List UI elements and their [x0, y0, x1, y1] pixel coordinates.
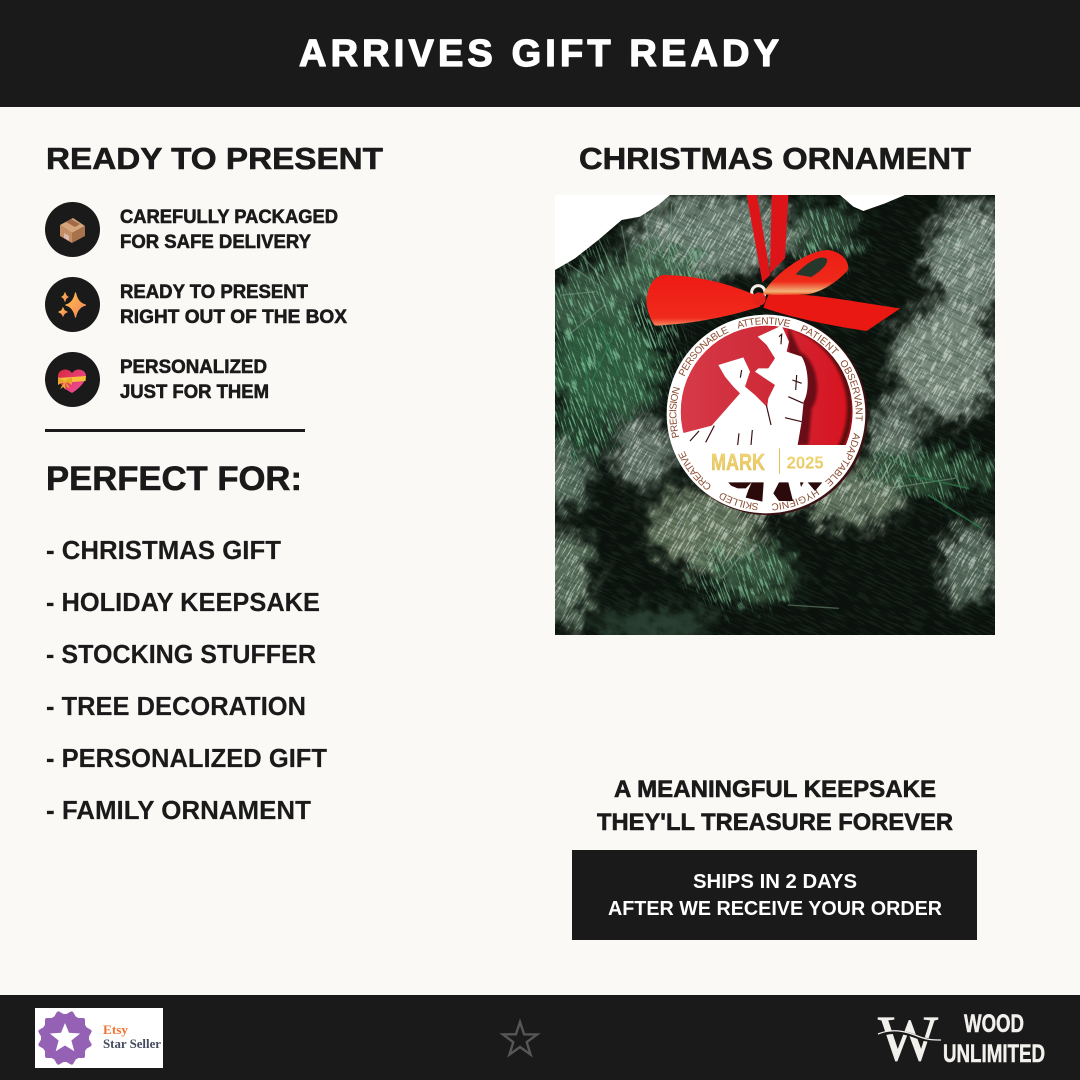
benefit: ready out of the box: RIGHT OUT OF THE BOX — [120, 306, 347, 328]
ornament ring words: CREATIVE — [678, 451, 710, 490]
benefit: ready out of the box — [45, 277, 347, 332]
list of occasions — [46, 537, 327, 825]
tagline: THEY'LL TREASURE FOREVER — [597, 809, 953, 836]
badge: etsy star seller: Star Seller — [103, 1037, 161, 1051]
pine foliage — [555, 195, 995, 635]
engraved name and year: 2025 — [787, 452, 824, 472]
panel: perfect for — [46, 460, 327, 825]
ornament ring words: ATTENTIVE — [738, 317, 790, 329]
footer band — [0, 995, 1080, 1080]
icon: sparkles — [59, 293, 86, 317]
list of occasions: - STOCKING STUFFER — [46, 641, 316, 669]
hanging ribbon — [747, 195, 788, 282]
red backing layer — [680, 326, 853, 445]
photo: ornament on pine branch — [555, 195, 995, 635]
logo: wood unlimited — [878, 1003, 1045, 1075]
benefit: personalized: PERSONALIZED — [120, 356, 267, 378]
ornament ring words: HYGIENIC — [772, 490, 820, 510]
shipping callout — [572, 850, 977, 940]
list of occasions: - CHRISTMAS GIFT — [46, 537, 281, 565]
benefit: personalized: JUST FOR THEM — [120, 381, 269, 403]
engraved name and year: MARK — [711, 449, 765, 475]
benefit: ready out of the box: READY TO PRESENT — [120, 281, 308, 303]
ornament — [646, 195, 900, 515]
heading: christmas ornament: CHRISTMAS ORNAMENT — [579, 141, 971, 176]
ornament ring words: PERSONABLE — [678, 326, 729, 376]
heading: perfect for: PERFECT FOR: — [46, 460, 302, 498]
logo: wood unlimited: UNLIMITED — [943, 1040, 1045, 1068]
icon: package box — [60, 218, 85, 243]
badge: etsy star seller: Etsy — [103, 1022, 129, 1037]
logo mark: W: W — [878, 1003, 939, 1075]
lower cutouts — [728, 482, 822, 502]
title: ARRIVES GIFT READY — [299, 33, 779, 75]
ornament ring words — [669, 317, 863, 510]
ornament ring words: OBSERVANT — [840, 360, 863, 422]
benefit: packaged: CAREFULLY PACKAGED — [120, 206, 338, 228]
ornament ring words: SKILLED — [720, 493, 758, 510]
list of occasions: - HOLIDAY KEEPSAKE — [46, 589, 320, 617]
engraved name and year — [711, 448, 824, 475]
shipping callout: SHIPS IN 2 DAYS — [693, 870, 857, 893]
silhouette: client and barber — [678, 326, 808, 445]
ornament ring words: PATIENT — [800, 325, 839, 354]
red bow — [647, 250, 900, 331]
header band — [0, 0, 1080, 107]
panel: ready to present — [45, 141, 383, 407]
icon: purple star badge — [38, 1011, 92, 1065]
ornament ring words: ADAPTABLE — [825, 432, 860, 487]
silhouette details — [690, 334, 803, 445]
benefit: personalized — [45, 352, 269, 407]
tagline — [597, 776, 953, 836]
ornament ring words: PRECISION — [669, 386, 680, 438]
icon: gift heart — [58, 369, 86, 393]
icon: centre star — [503, 1022, 537, 1055]
shipping callout: AFTER WE RECEIVE YOUR ORDER — [608, 897, 942, 920]
logo: wood unlimited: WOOD — [964, 1010, 1024, 1038]
badge: etsy star seller — [35, 1008, 163, 1068]
list of occasions: - TREE DECORATION — [46, 693, 306, 721]
tagline: A MEANINGFUL KEEPSAKE — [614, 776, 936, 803]
heading: ready to present: READY TO PRESENT — [46, 141, 383, 176]
benefit: packaged: FOR SAFE DELIVERY — [120, 231, 311, 253]
list of occasions: - PERSONALIZED GIFT — [46, 745, 327, 773]
benefit: packaged — [45, 202, 338, 257]
wooden disc — [667, 315, 868, 515]
list of occasions: - FAMILY ORNAMENT — [46, 797, 311, 825]
